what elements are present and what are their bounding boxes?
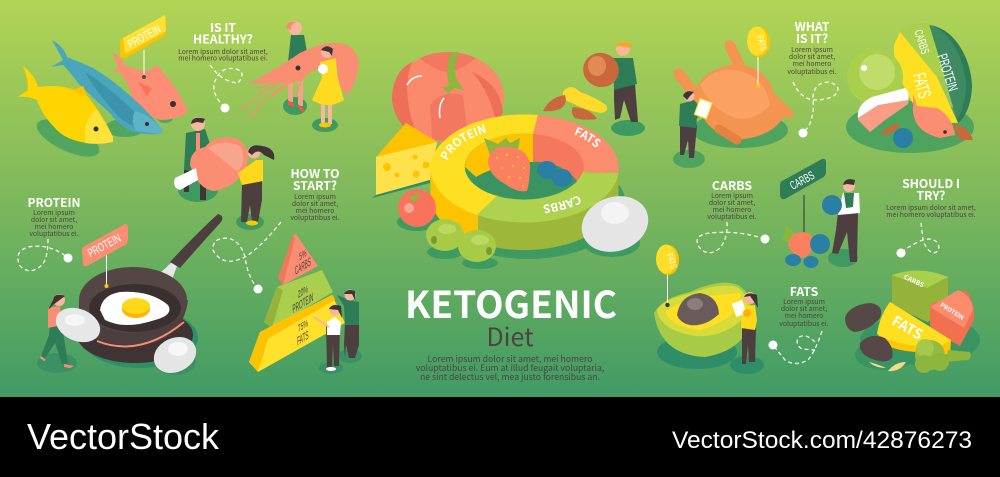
sign: protein on fish [120,15,166,79]
heading: how to start: HOW TO [290,164,340,182]
heading: protein: mei homero [35,221,73,231]
icon: egg [574,187,656,261]
chart: macronutrient donut: PROTEIN [440,124,486,160]
heading: how to start: dolor sit amet, [292,198,338,208]
illustration: two people at pyramid [314,290,362,374]
sign: protein on pan: PROTEIN [86,232,123,260]
heading: what is it: mei homero [793,58,831,68]
illustration: shrimp with two people [241,21,358,132]
heading: what is it: WHAT [795,17,830,35]
sign: fats circle on chicken [747,26,770,88]
heading: fats: mei homero [785,310,823,320]
heading: fats: voluptatibus ei. [779,318,829,328]
heading: is it healthy: mei homero voluptatibus ei. [178,52,268,62]
heading: carbs: Lorem ipsum [711,190,753,200]
sign: protein on pan [82,224,128,288]
heading: should i try: mei homero voluptatibus ei. [886,209,976,219]
chart: macronutrient pyramid: 75% [298,317,308,334]
heading: protein: Lorem ipsum [33,207,75,217]
heading: is it healthy: HEALTHY? [193,30,253,48]
illustration: man with blackberry [822,179,860,267]
illustration: three fish [18,40,188,164]
heading: is it healthy [178,18,268,62]
watermark footer: VectorStock.com/42876273 [672,427,972,454]
heading: protein [28,194,80,238]
heading: what is it: dolor sit amet, [789,51,835,61]
heading: what is it: voluptatibus ei. [787,66,837,76]
heading: how to start: voluptatibus ei. [290,212,340,222]
title: KETOGENIC [405,275,617,329]
chart: macronutrient pyramid: 20% [298,283,308,300]
title: Lorem ipsum dolor sit amet, mei homero [428,352,592,365]
heading: what is it [787,17,837,76]
illustration: cheese wedge [372,123,437,198]
heading: how to start: Lorem ipsum [294,191,336,201]
dashed path: carbs [697,222,770,253]
dashed path: should i try [896,223,939,258]
icon: blueberries [537,161,572,187]
title: ne sint delectus vel, mea justo forensibus an. [420,370,600,383]
chart: macronutrient pyramid: CARBS [295,255,311,278]
illustration: woman with walnut and nuts [543,42,645,136]
title [405,275,617,383]
sign: carbs with berries [780,159,830,268]
dashed path: protein [18,239,72,271]
icon: strawberry [484,138,530,191]
heading: protein: dolor sit amet, [31,214,77,224]
dashed path: is it healthy [210,65,242,112]
heading: should i try: TRY? [917,186,945,204]
illustration: food group with pie: CARBS [911,28,931,56]
heading: fats [779,282,829,328]
heading: carbs: CARBS [712,176,752,194]
illustration: frying pan with egg [77,214,222,368]
chart: macronutrient donut: FATS [574,126,601,147]
illustration: man with clipboard [673,90,712,168]
sign: fats circle on chicken: FATS [754,34,769,52]
illustration: food group with pie [846,23,974,153]
icon: olives [426,219,498,269]
heading: how to start: START? [293,176,337,194]
illustration: avocado with fats sign: FATS [664,252,679,270]
heading: fats: Lorem ipsum [783,296,825,306]
heading: should i try: SHOULD I [902,174,960,192]
heading: protein: PROTEIN [28,194,80,211]
chart: macronutrient blocks with food: CARBS [903,271,926,289]
chart: macronutrient pyramid [249,234,345,372]
illustration: meat with two people [174,117,274,230]
chart: macronutrient pyramid: PROTEIN [292,290,313,316]
dashed path: what is it [793,82,838,138]
heading: fats: dolor sit amet, [781,303,827,313]
heading: protein: voluptatibus ei. [29,228,79,238]
heading: is it healthy: IS IT [210,18,236,36]
sign: protein on fish: PROTEIN [126,23,163,51]
illustration: pumpkin-shaped tomato [392,52,504,142]
sign: carbs with berries: CARBS [788,169,817,193]
heading: is it healthy: Lorem ipsum dolor sit amet, [178,46,268,56]
watermark footer [27,416,972,457]
illustration: food group with pie: FATS [908,71,933,101]
heading: how to start [290,164,340,222]
heading: fats: FATS [790,282,819,300]
heading: carbs [707,176,757,221]
title: voluptatibus ei. Eum at illud feugait voluptaria, [416,361,604,374]
heading: carbs: voluptatibus ei. [707,211,757,221]
heading: carbs: dolor sit amet, [709,197,755,207]
heading: should i try [886,174,976,219]
chart: macronutrient donut: CARBS [544,196,580,214]
icon: egg [148,330,202,380]
heading: what is it: Lorem ipsum [791,44,833,54]
heading: what is it: IS IT? [796,29,828,47]
chart: macronutrient donut [430,114,625,259]
icon: small tomato [397,189,437,231]
heading: should i try: Lorem ipsum dolor sit amet, [886,202,976,212]
chart: macronutrient pyramid: 5% [299,247,307,263]
illustration: food group with pie: PROTEIN [934,52,962,93]
chart: macronutrient blocks with food: PROTEIN [939,300,966,322]
chart: macronutrient pyramid: FATS [297,328,309,348]
chart: macronutrient blocks with food [845,270,980,373]
watermark footer: VectorStock [27,416,220,457]
dashed path: fats [768,331,822,364]
illustration: avocado with fats sign [654,244,751,369]
illustration: woman with clipboard [730,292,764,374]
chart: macronutrient blocks with food: FATS [888,311,927,345]
title: Diet [486,318,534,354]
heading: how to start: mei homero [296,205,334,215]
dashed path: how to start [213,222,281,294]
illustration: roast chicken [679,46,789,148]
heading: carbs: mei homero [713,204,751,214]
illustration: woman with egg [37,294,105,373]
